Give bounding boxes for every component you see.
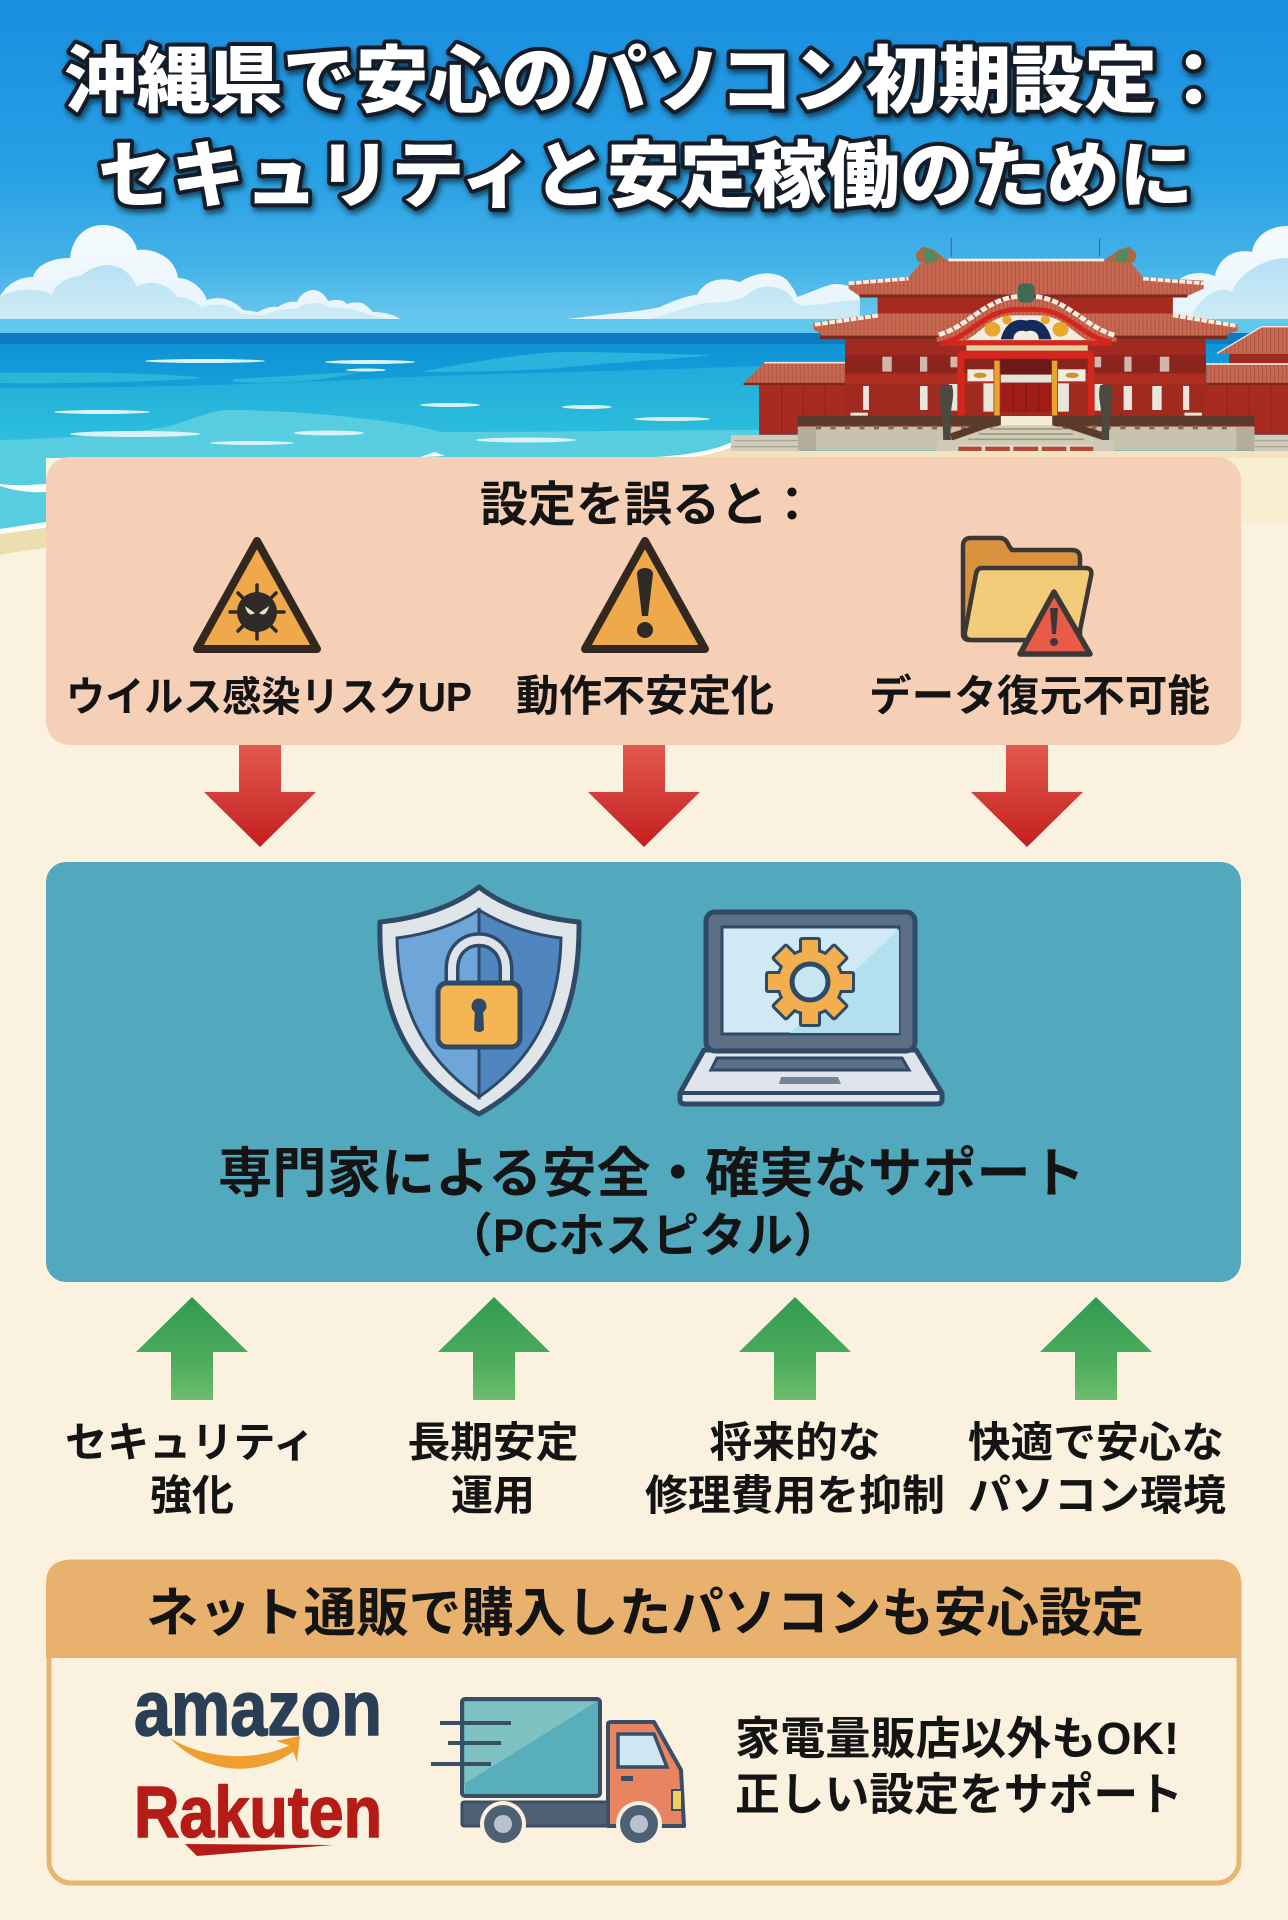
arrow: red down 1 — [204, 745, 316, 847]
heading: setting mistakes: 設定を誤ると： — [480, 479, 816, 532]
sky background — [0, 0, 1288, 333]
title — [64, 41, 1230, 217]
upper roof — [849, 260, 1204, 296]
gable decoration — [966, 315, 1087, 340]
icon: warning triangle — [585, 541, 705, 649]
benefit: security — [65, 1419, 315, 1519]
cloud: middle — [568, 273, 860, 319]
benefit: reduce repair costs: 修理費用を抑制 — [645, 1472, 945, 1519]
benefit: long-term stability: 運用 — [451, 1472, 535, 1519]
main walls — [845, 338, 1206, 435]
Shuri Castle building — [731, 238, 1288, 457]
icon: laptop with gear — [680, 912, 942, 1104]
terrace, railing and stairs — [798, 427, 1254, 451]
heading: online purchase: ネット通販で購入したパソコンも安心設定 — [146, 1584, 1144, 1643]
benefit: security: セキュリティ — [65, 1419, 315, 1466]
benefit: reduce repair costs: 将来的な — [710, 1419, 880, 1466]
right sand patch — [1200, 450, 1288, 522]
label: virus risk: ウイルス感染リスクUP — [66, 674, 472, 720]
icon: delivery truck — [431, 1699, 684, 1847]
cloud: right — [1170, 226, 1288, 319]
roof dragons — [916, 247, 946, 263]
title: セキュリティと安定稼働のために — [98, 136, 1193, 217]
sea — [0, 319, 1288, 555]
front balustrade — [937, 440, 958, 457]
arrow: green up 3 — [739, 1297, 851, 1400]
arrow: green up 2 — [438, 1297, 550, 1400]
arrow: green up 4 — [1040, 1297, 1152, 1400]
porch beams and columns — [941, 341, 1111, 346]
logo: Rakuten: Rakuten — [134, 1773, 382, 1853]
upper wall — [878, 295, 1173, 318]
subheading: PC Hospital: （PCホスピタル） — [446, 1209, 840, 1262]
icon: folder with warning — [963, 538, 1091, 654]
benefit: comfortable environment: 快適で安心な — [968, 1419, 1224, 1466]
far right wing roof — [1217, 327, 1288, 354]
benefit: comfortable environment — [968, 1419, 1226, 1519]
benefit: security: 強化 — [150, 1472, 234, 1519]
panel: online purchase — [46, 1560, 1241, 1883]
benefit: long-term stability — [408, 1419, 578, 1519]
label: data unrecoverable: データ復元不可能 — [869, 672, 1210, 721]
benefit: long-term stability: 長期安定 — [408, 1419, 578, 1466]
icon: shield with lock — [380, 887, 579, 1114]
text: support note — [735, 1713, 1183, 1820]
benefit: comfortable environment: パソコン環境 — [968, 1472, 1226, 1519]
panel: expert support — [46, 862, 1241, 1282]
text: support note: 正しい設定をサポート — [735, 1769, 1183, 1820]
sand strip in front of building — [800, 451, 1288, 458]
icon: virus warning — [197, 541, 317, 649]
logo: amazon: amazon — [134, 1664, 382, 1752]
text: support note: 家電量販店以外もOK! — [735, 1713, 1179, 1764]
middle roof — [813, 313, 1238, 337]
benefit: reduce repair costs — [645, 1419, 945, 1519]
panel: setting mistakes — [46, 457, 1241, 745]
title: 沖縄県で安心のパソコン初期設定： — [64, 41, 1230, 122]
side wings — [759, 384, 848, 435]
arrow: red down 3 — [971, 745, 1083, 847]
heading: expert support: 専門家による安全・確実なサポート — [218, 1144, 1085, 1204]
arrow: red down 2 — [588, 745, 700, 847]
arrow: green up 1 — [136, 1297, 248, 1400]
gable — [937, 298, 1117, 342]
cloud: left — [0, 225, 400, 319]
label: unstable operation: 動作不安定化 — [516, 673, 774, 721]
